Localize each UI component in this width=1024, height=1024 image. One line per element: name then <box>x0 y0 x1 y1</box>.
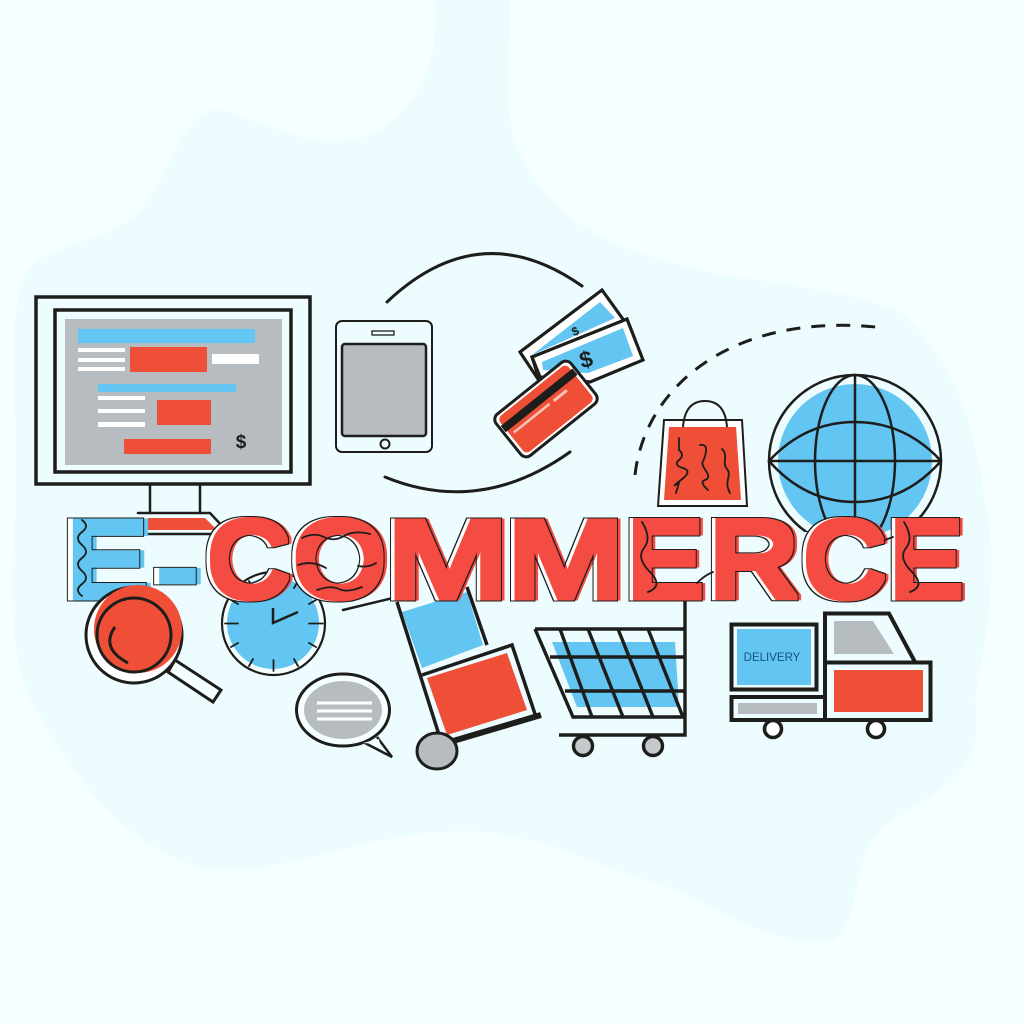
monitor <box>36 297 310 534</box>
speech bubble <box>296 674 392 757</box>
title: E-COMMERCE: M <box>504 497 624 622</box>
delivery truck <box>732 613 930 738</box>
shopping bag <box>658 401 747 506</box>
orbit arcs <box>385 254 582 492</box>
monitor: $ <box>236 432 247 453</box>
hand truck with boxes <box>343 587 541 769</box>
title: E-COMMERCE: R <box>706 497 798 622</box>
title: E-COMMERCE: C <box>800 498 886 622</box>
banknotes: $ <box>569 323 582 339</box>
title: E-COMMERCE: M <box>383 497 509 623</box>
title: E-COMMERCE: E <box>62 496 148 622</box>
tablet <box>336 321 432 452</box>
title: E-COMMERCE: C <box>204 498 290 622</box>
title: E-COMMERCE <box>62 496 963 623</box>
banknotes: $ <box>576 345 596 373</box>
title: E-COMMERCE: - <box>151 514 199 621</box>
globe <box>769 375 941 547</box>
delivery label: DELIVERY <box>744 652 801 664</box>
title: E-COMMERCE: O <box>290 498 386 623</box>
shopping cart <box>535 600 685 756</box>
banknotes <box>520 290 643 382</box>
credit card <box>492 358 600 460</box>
title: E-COMMERCE: E <box>624 497 704 622</box>
title: E-COMMERCE: E <box>887 498 963 623</box>
clock <box>222 572 325 675</box>
magnifying glass <box>86 585 221 702</box>
dashed delivery path <box>635 325 885 475</box>
